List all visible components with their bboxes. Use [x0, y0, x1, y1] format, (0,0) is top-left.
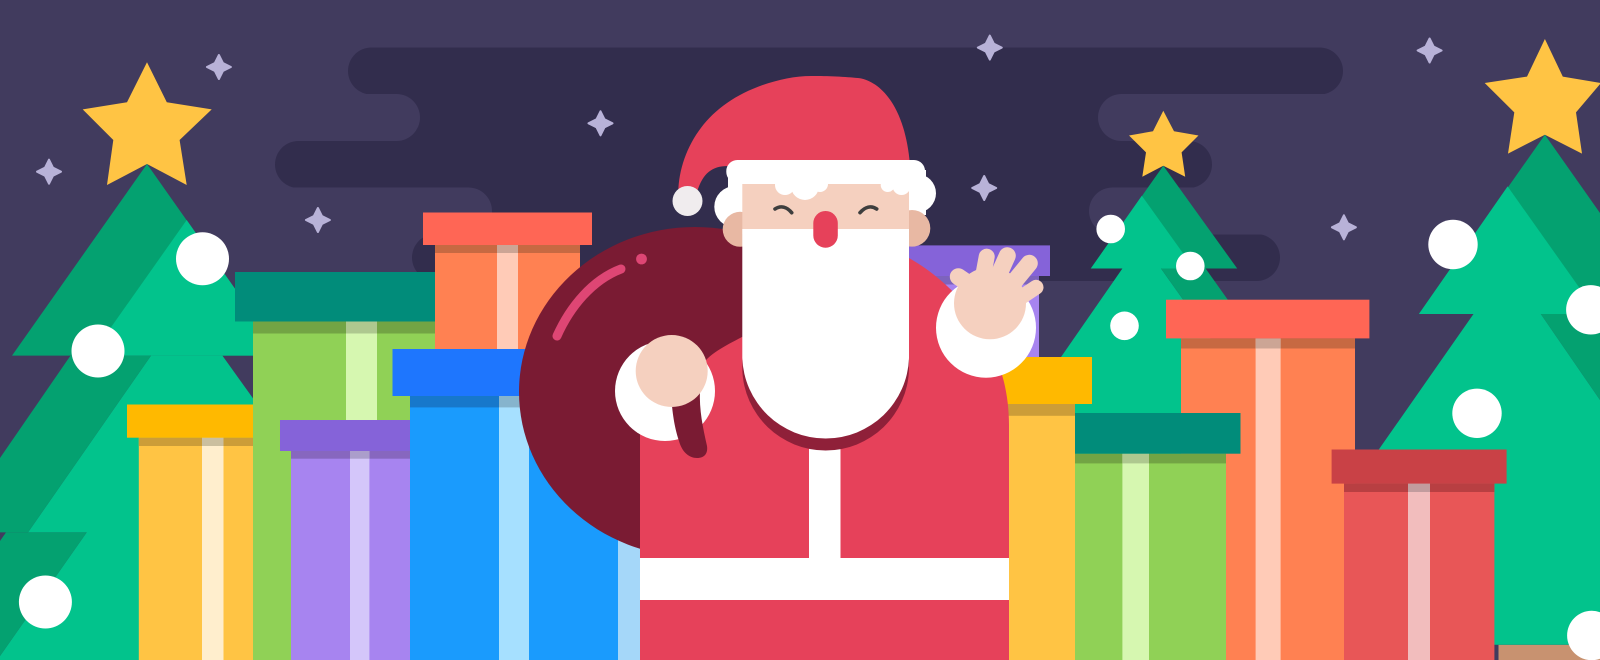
gift: yellow right — [990, 357, 1092, 660]
hat — [678, 76, 910, 192]
left hand — [636, 335, 708, 407]
gift: orange right — [1166, 300, 1369, 660]
gift: purple behind Santa — [900, 245, 1050, 366]
small right Christmas tree — [1000, 111, 1245, 660]
gift: orange back — [423, 212, 592, 360]
hat pom — [672, 186, 702, 216]
Santa — [615, 76, 1036, 660]
eyes — [775, 207, 877, 213]
Santa's sack — [519, 227, 871, 557]
hair — [714, 170, 936, 227]
right cuff — [936, 278, 1036, 378]
gift: purple left — [280, 420, 416, 660]
gift: blue — [392, 349, 642, 660]
ears — [723, 210, 930, 247]
left cuff — [615, 341, 715, 441]
beard shadow — [742, 360, 909, 451]
beard — [742, 229, 909, 439]
belt and coat strip — [640, 445, 1009, 600]
gift: yellow left — [127, 404, 264, 660]
tan box at bottom right — [1498, 645, 1600, 660]
hat brim and curls — [726, 160, 925, 200]
sack rope — [672, 390, 707, 458]
body — [640, 258, 1009, 660]
big right Christmas tree — [1340, 39, 1600, 660]
right waving hand — [954, 256, 1036, 339]
gift: red right — [1332, 450, 1507, 660]
sparkling stars — [37, 36, 1442, 239]
gift: green left — [235, 272, 443, 660]
gift: green right — [1075, 413, 1240, 660]
face — [742, 184, 909, 234]
dark clouds — [0, 48, 1600, 281]
left Christmas tree — [0, 62, 340, 660]
nose — [813, 211, 838, 248]
